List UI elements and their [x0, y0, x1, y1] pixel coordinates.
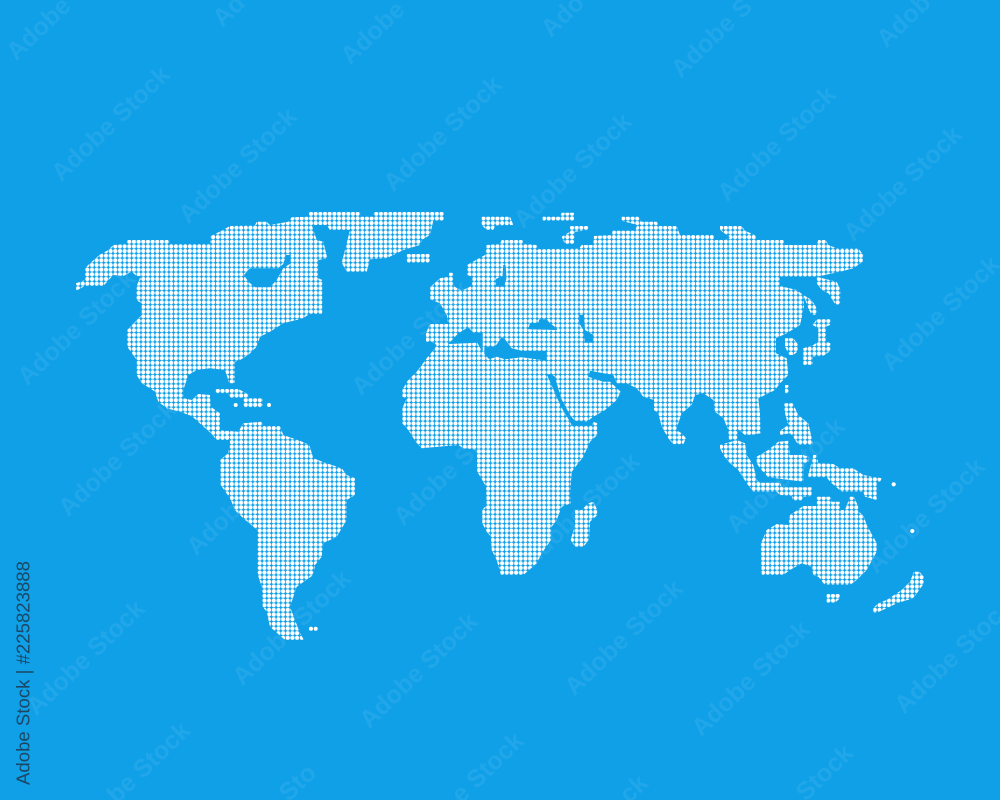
- watermarks: Adobe Stock: [861, 453, 990, 579]
- Japan: [803, 319, 831, 365]
- watermarks: Adobe Stock: [227, 565, 356, 691]
- Eurasia and Africa: [402, 217, 863, 575]
- Borneo and Sulawesi: [757, 441, 808, 482]
- Novaya Zemlya: [562, 226, 588, 244]
- stock id side label: Adobe Stock | #225823888: [14, 561, 34, 785]
- Australia: [761, 497, 877, 585]
- Franz Josef Land: [543, 213, 574, 221]
- watermarks: Adobe Stock: [838, 121, 967, 247]
- watermarks: Adobe Stock: [53, 396, 182, 522]
- Cuba: [215, 389, 248, 398]
- watermarks: Adobe Stock: [21, 595, 150, 721]
- New Zealand: [873, 572, 924, 613]
- watermarks: Adobe Stock: [516, 448, 645, 574]
- watermarks: Adobe Stock: [346, 275, 475, 401]
- watermarks: Adobe Stock: [354, 608, 483, 734]
- watermarks: Adobe Stock: [721, 413, 850, 539]
- watermarks: Adobe Stock: [508, 108, 637, 234]
- Iceland: [407, 254, 430, 263]
- watermarks: Adobe Stock: [173, 103, 302, 229]
- watermarks: Adobe Stock: [388, 405, 517, 531]
- Svalbard: [482, 217, 513, 230]
- Hispaniola: [243, 398, 263, 407]
- South America: [217, 422, 355, 640]
- watermarks: Adobe Stock: [181, 435, 310, 561]
- watermarks: Adobe Stock: [559, 575, 688, 701]
- Kamchatka: [817, 277, 841, 305]
- watermarks: Adobe Stock: [712, 81, 841, 207]
- Sakhalin: [803, 295, 817, 315]
- watermarks: Adobe Stock: [46, 61, 175, 187]
- Sumatra and Java: [720, 440, 812, 501]
- world map dots: [76, 212, 924, 640]
- Tasmania: [827, 594, 840, 603]
- Madagascar: [571, 502, 597, 547]
- Philippines: [780, 403, 813, 445]
- watermarks: Adobe Stock: [378, 71, 507, 197]
- small island dots: [234, 403, 914, 631]
- New Guinea: [808, 455, 882, 500]
- watermarks: Adobe Stock: [686, 616, 815, 742]
- Korea: [785, 338, 798, 355]
- North America and Greenland: [76, 212, 444, 440]
- watermarks: Adobe Stock: [12, 265, 141, 391]
- Taiwan: [785, 385, 789, 393]
